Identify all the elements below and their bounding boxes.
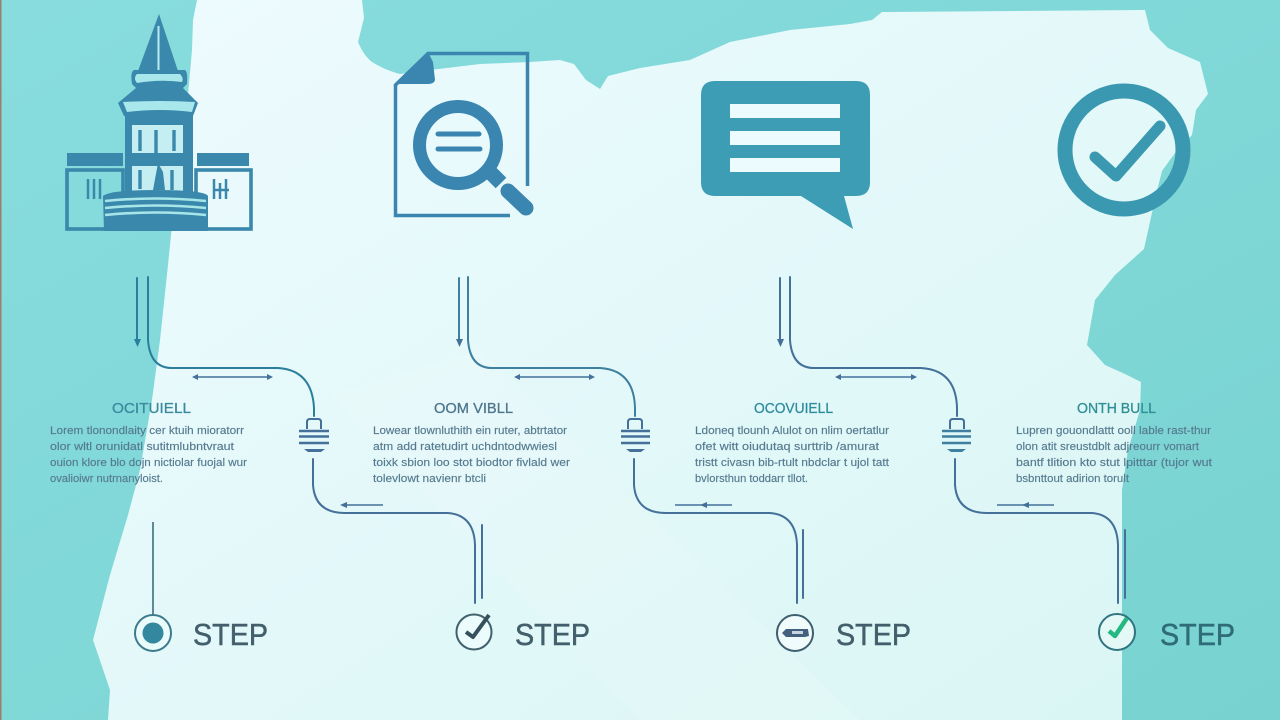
step 4 text block <box>1016 400 1212 485</box>
lock connector <box>942 419 971 452</box>
step marker 2 <box>456 614 590 652</box>
stepped base <box>103 190 208 231</box>
step marker 3 <box>777 615 911 652</box>
magnifier lens <box>420 106 496 184</box>
step 3 text block: tristt civasn bib-rtult nbdclar t ujol tatt <box>695 457 889 469</box>
tower <box>125 112 193 194</box>
folded corner <box>395 52 435 84</box>
step 2 text block <box>373 400 570 485</box>
step 2 text block: OOM VIBLL <box>434 400 513 417</box>
lock connector <box>621 419 650 452</box>
label: STEP <box>1160 617 1235 652</box>
step 4 text block: bsbnttout adirion torult <box>1016 473 1129 485</box>
step 2 text block: toixk sbion loo stot biodtor fivlald wer <box>373 457 570 469</box>
step marker 1 <box>135 522 268 652</box>
step marker 4 <box>1099 614 1235 652</box>
label: STEP <box>193 617 268 652</box>
step 1 text block: ouion klore blo dojn nictiolar fuojal wur <box>50 457 247 469</box>
lock connector <box>299 419 329 452</box>
step 2 text block: Lowear tlownluthith ein ruter, abtrtator <box>373 425 567 437</box>
ring and roof <box>118 70 198 116</box>
step 4 text block: Lupren gouondlattt ooll lable rast-thur <box>1016 425 1211 437</box>
soft diagonal band <box>330 350 860 720</box>
connector: step 2 <box>456 277 803 603</box>
magnifier handle <box>488 170 501 183</box>
step 3 text block: Ldoneq tlounh Alulot on nlim oertatlur <box>695 425 889 437</box>
label: STEP <box>836 617 911 652</box>
step 1 text block <box>50 400 247 485</box>
label: STEP <box>515 617 590 652</box>
step 1 text block: ovalioiwr nutrnanyloist. <box>50 473 163 485</box>
step 3 text block <box>695 400 889 485</box>
connector: step 3 <box>777 277 1125 603</box>
step 2 text block: atm add ratetudirt uchdntodwwiesl <box>373 441 557 453</box>
step 2 text block: tolevlowt navienr btcli <box>373 473 486 485</box>
step 4 text block: ONTH BULL <box>1077 400 1156 417</box>
icon: courthouse <box>67 14 251 231</box>
wings <box>67 153 123 166</box>
step 3 text block: ofet witt oiudutaq surttrib /amurat <box>695 441 879 453</box>
step 3 text block: bvlorsthun toddarr tllot. <box>695 473 808 485</box>
connector: step 1 <box>134 277 482 603</box>
step 3 text block: OCOVUIELL <box>754 400 833 417</box>
step 4 text block: olon atit sreustdblt adjreourr vomart <box>1016 441 1199 453</box>
spire <box>138 14 178 71</box>
icon: check circle <box>1065 91 1183 209</box>
icon: document with magnifier <box>395 52 528 216</box>
icon: speech bubble <box>701 81 870 229</box>
step 1 text block: OCITUIELL <box>112 400 191 417</box>
step 4 text block: bantf tlition kto stut lpitttar (tujor wut <box>1016 457 1212 469</box>
step 1 text block: olor wltl orunidatl sutitmlubntvraut <box>50 441 234 453</box>
step 1 text block: Lorem tlonondlaity cer ktuih mioratorr <box>50 425 244 437</box>
left edge line <box>0 0 2 720</box>
